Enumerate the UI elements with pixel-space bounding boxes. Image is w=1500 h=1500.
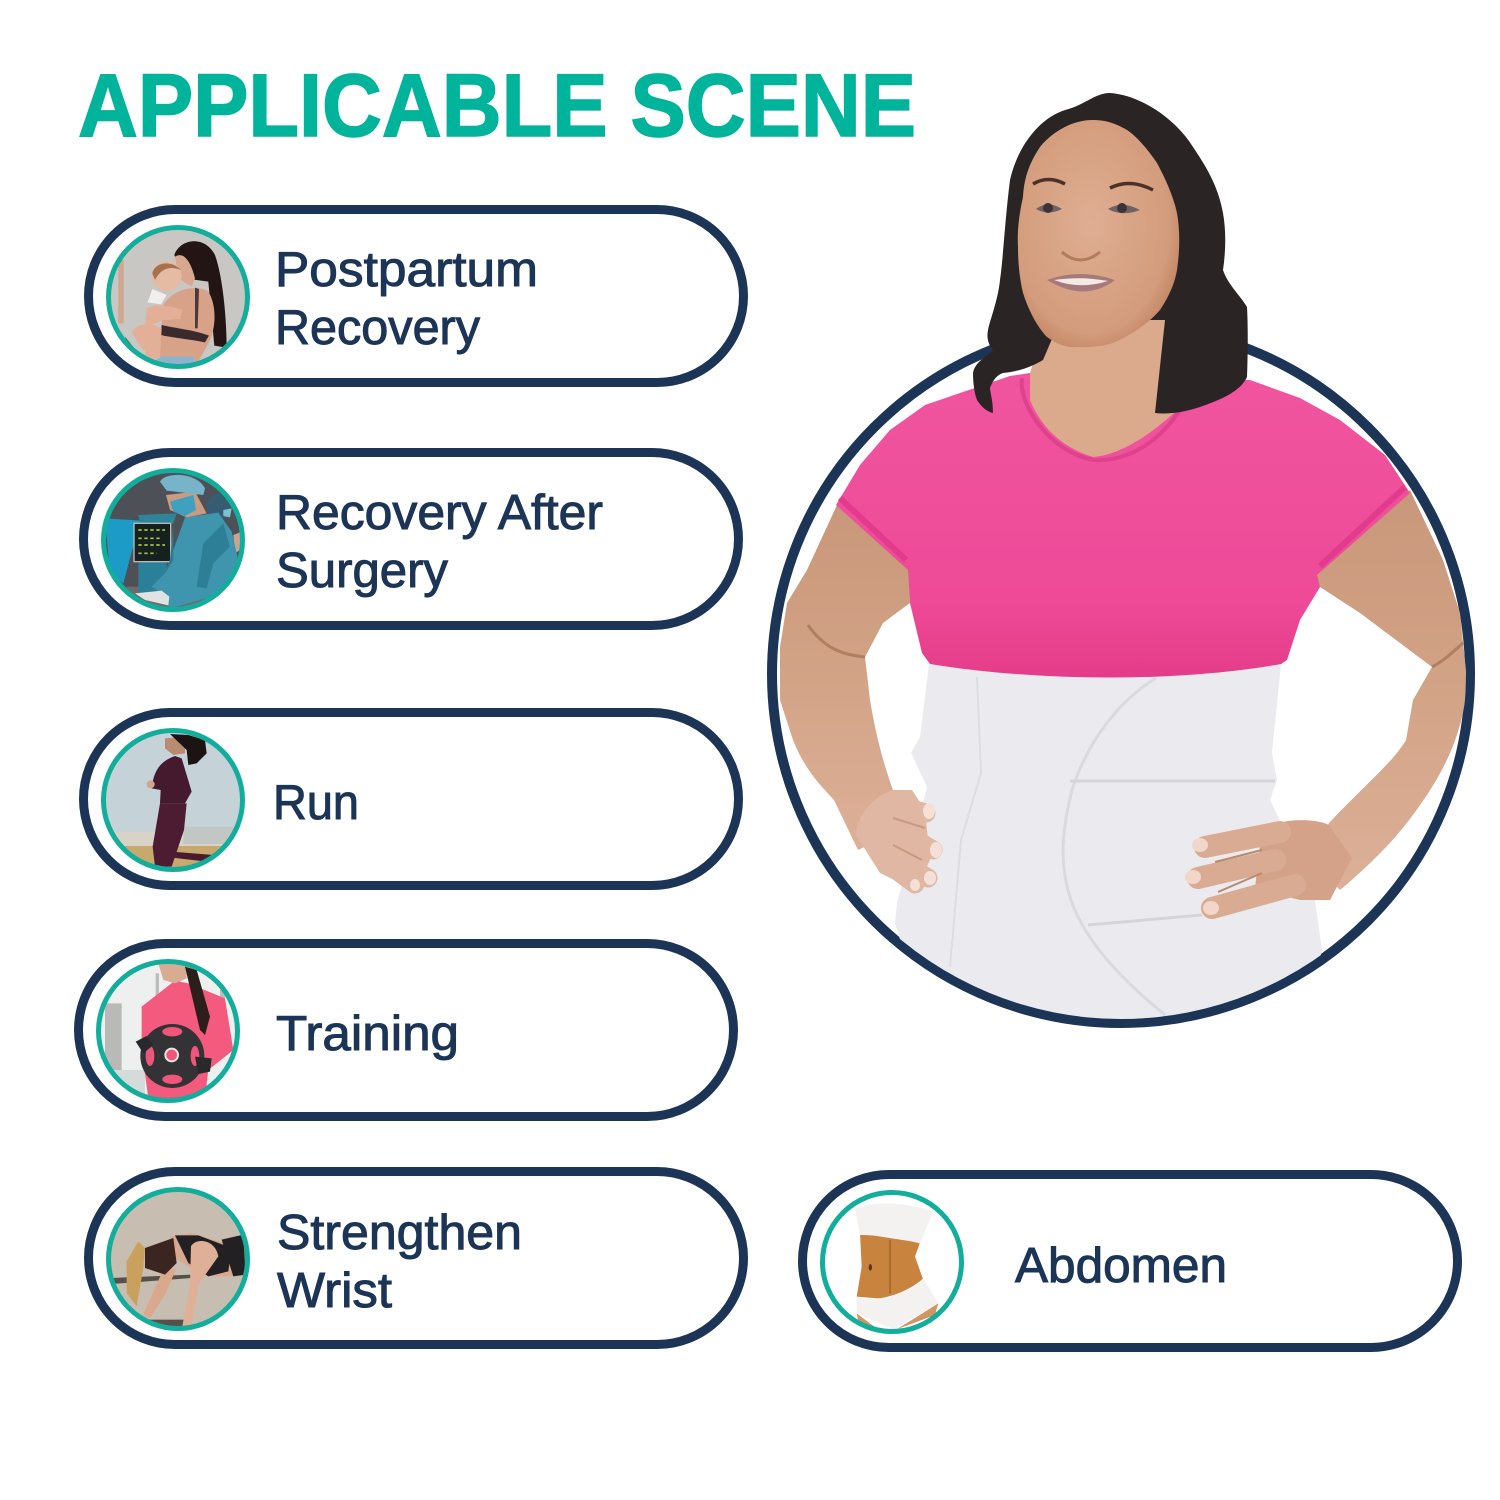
label: strengthen wrist: Strengthen <box>277 1206 522 1260</box>
panel: run <box>84 712 738 886</box>
label: postpartum recovery: Recovery <box>275 301 480 355</box>
icon: woman with weight plate <box>96 959 240 1103</box>
label: abdomen: Abdomen <box>1015 1239 1227 1293</box>
panel: strengthen wrist <box>88 1172 744 1344</box>
arm creases <box>808 625 1463 667</box>
title: APPLICABLE SCENE <box>78 55 916 155</box>
facial features <box>1033 180 1153 292</box>
panel: training <box>78 944 734 1116</box>
icon: mother and baby <box>106 225 250 369</box>
arm: left <box>780 505 910 850</box>
icon: plank exercise <box>106 1187 250 1331</box>
label: recovery after surgery: Recovery After <box>276 486 603 540</box>
hair <box>973 93 1248 413</box>
label: training: Training <box>276 1007 459 1061</box>
hand: left <box>856 790 942 891</box>
icon: toned abdomen <box>820 1190 964 1334</box>
hand: right <box>1185 820 1352 915</box>
panel: recovery after surgery <box>84 452 738 626</box>
panel: postpartum recovery <box>88 210 744 382</box>
panel: abdomen <box>802 1174 1458 1348</box>
illustration: woman wearing abdominal binder <box>772 93 1470 1040</box>
label: run: Run <box>273 776 359 830</box>
binder <box>895 664 1322 1040</box>
label: strengthen wrist: Wrist <box>277 1264 392 1318</box>
arm: right <box>1310 490 1467 890</box>
label: recovery after surgery: Surgery <box>276 544 448 598</box>
shirt <box>836 373 1410 678</box>
icon: surgeon <box>101 468 245 612</box>
neck <box>1030 320 1174 457</box>
label: postpartum recovery: Postpartum <box>275 243 538 297</box>
icon: runner <box>101 728 245 872</box>
ring behind the figure <box>772 325 1470 1023</box>
sleeve hems <box>840 487 1405 566</box>
face <box>1018 120 1179 347</box>
